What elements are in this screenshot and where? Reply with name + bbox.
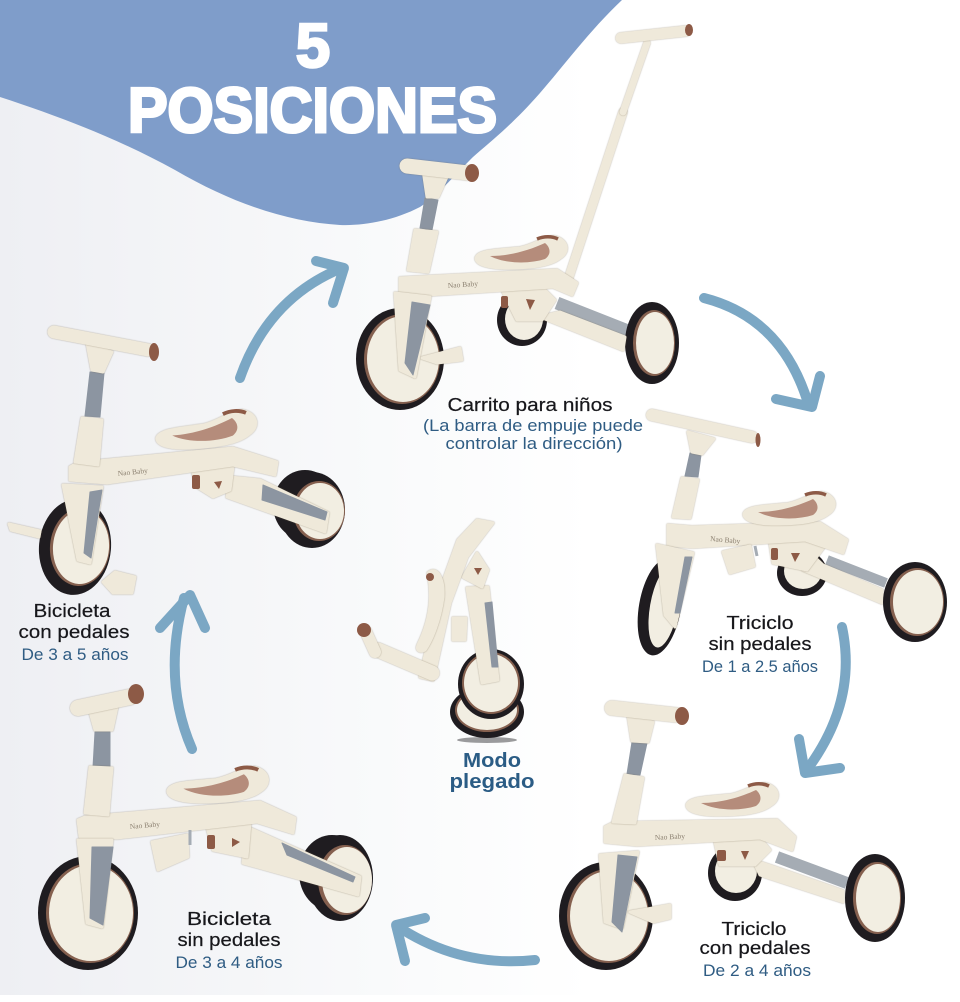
blue header shape <box>0 0 622 225</box>
trike: bicicleta sin pedales <box>38 684 373 970</box>
label: bicicleta sin pedales: De 3 a 4 años <box>176 954 282 972</box>
label: triciclo sin pedales <box>702 612 818 676</box>
label: carrito para niños: controlar la dirección) <box>446 435 622 453</box>
label: triciclo sin pedales: De 1 a 2.5 años <box>702 658 818 676</box>
label: bicicleta sin pedales: Bicicleta <box>187 908 272 929</box>
arrow: top right <box>704 298 820 407</box>
label: modo plegado: plegado <box>450 771 534 793</box>
label: triciclo sin pedales: Triciclo <box>726 612 794 633</box>
label: triciclo sin pedales: sin pedales <box>708 633 812 654</box>
label: bicicleta con pedales <box>18 600 130 664</box>
label: modo plegado: Modo <box>463 750 521 772</box>
trike: triciclo con pedales <box>559 707 905 970</box>
trike: bicicleta con pedales <box>9 332 345 598</box>
trike: triciclo sin pedales <box>631 415 947 659</box>
trike: bicicleta sin pedales: Nao Baby <box>129 819 161 831</box>
title <box>128 12 497 146</box>
label: carrito para niños <box>423 394 643 453</box>
label: triciclo con pedales: Triciclo <box>722 918 786 939</box>
label: carrito para niños: Carrito para niños <box>448 394 612 415</box>
trike: bicicleta con pedales: Nao Baby <box>117 466 148 478</box>
trike: carrito para niños: Nao Baby <box>448 279 479 290</box>
arrow: bottom <box>396 918 535 961</box>
label: modo plegado <box>450 750 534 793</box>
label: carrito para niños: (La barra de empuje puede <box>423 417 643 435</box>
label: triciclo con pedales <box>700 918 811 980</box>
trike: carrito para niños <box>356 24 693 410</box>
arrow: left <box>160 595 205 749</box>
title: POSICIONES <box>128 76 497 146</box>
label: bicicleta sin pedales <box>176 908 282 972</box>
label: bicicleta con pedales: con pedales <box>18 621 130 642</box>
folded trike <box>357 520 524 743</box>
trike: triciclo con pedales: Nao Baby <box>655 831 686 842</box>
label: triciclo con pedales: con pedales <box>700 937 810 958</box>
arrow: top left <box>240 261 344 378</box>
label: triciclo con pedales: De 2 a 4 años <box>703 962 811 980</box>
title: 5 <box>296 12 330 81</box>
label: bicicleta sin pedales: sin pedales <box>178 929 280 950</box>
label: bicicleta con pedales: Bicicleta <box>34 600 111 621</box>
label: bicicleta con pedales: De 3 a 5 años <box>22 646 128 664</box>
trike: triciclo sin pedales: Nao Baby <box>710 534 741 546</box>
arrow: right <box>799 627 846 773</box>
